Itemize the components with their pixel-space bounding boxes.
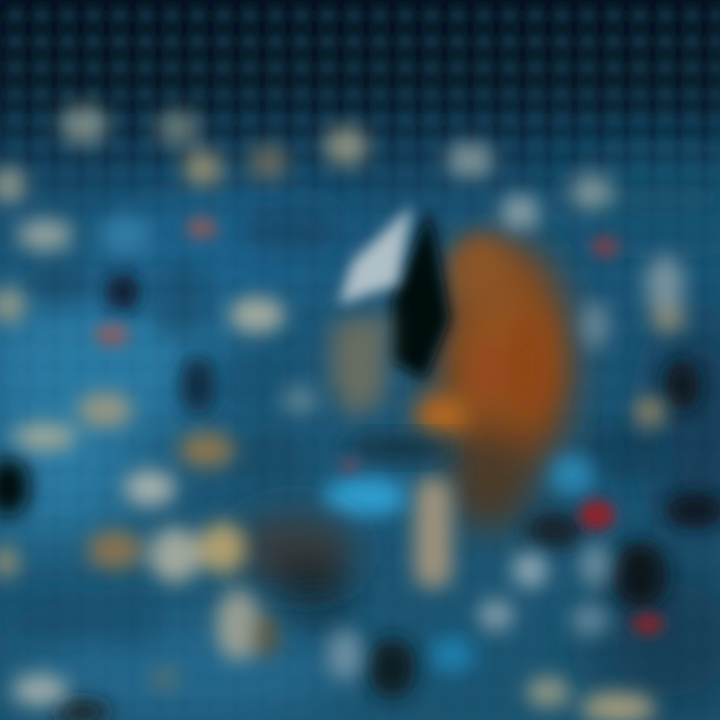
dark stone foreground — [235, 514, 355, 596]
dark shadow below cone — [345, 436, 455, 460]
cyan patches — [99, 215, 594, 673]
grid texture — [0, 0, 720, 394]
mottled dark patches — [10, 206, 660, 650]
dark cone — [390, 208, 450, 380]
red accents — [94, 216, 664, 635]
sphere highlight — [414, 234, 556, 435]
amber sphere — [435, 240, 575, 530]
dark accents — [0, 272, 720, 720]
pale stem — [414, 478, 452, 588]
grey lower facet — [330, 312, 390, 420]
silver cone facet — [338, 205, 412, 305]
background tonal patches — [0, 160, 720, 720]
